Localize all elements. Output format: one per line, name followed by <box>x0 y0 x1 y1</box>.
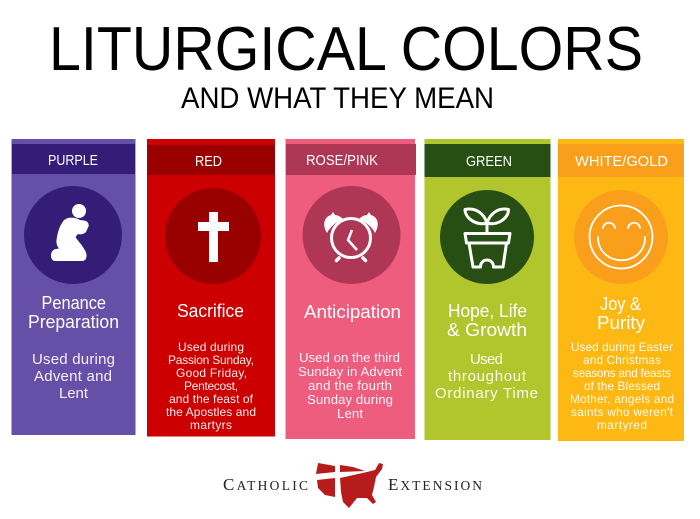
text: gold usage: of the Blessed <box>584 380 660 393</box>
heading: penance preparation <box>28 292 119 332</box>
header band: rose/pink <box>286 144 416 175</box>
heading: sacrifice: Sacrifice <box>177 300 244 321</box>
logo: Catholic Extension <box>223 463 482 508</box>
text: red usage: Used during <box>178 340 244 354</box>
heading: hope, life and growth: & Growth <box>447 319 527 340</box>
text: rose usage: and the fourth <box>308 378 392 393</box>
text: green usage: throughout <box>448 368 527 385</box>
text: red usage: Passion Sunday, <box>168 353 254 367</box>
text: rose usage: Sunday during <box>307 392 393 407</box>
text: red usage: and the feast of <box>169 392 254 406</box>
subtitle: AND WHAT THEY MEAN <box>181 82 494 115</box>
text: gold usage: martyred <box>597 419 647 432</box>
header band: rose/pink: ROSE/PINK <box>306 153 378 169</box>
header band: purple <box>12 144 135 174</box>
text: rose usage <box>298 350 402 421</box>
text: gold usage: Mother, angels and <box>570 393 674 406</box>
logo wordmark: Catholic: CATHOLIC <box>223 475 308 494</box>
heading: joy and purity <box>597 293 646 333</box>
text: purple usage: Advent and <box>34 368 112 385</box>
heading: hope, life and growth <box>447 300 527 340</box>
header band: green <box>424 144 550 177</box>
text: rose usage: Sunday in Advent <box>298 364 402 379</box>
icon: potted plant <box>440 190 534 284</box>
title: LITURGICAL COLORS <box>49 15 643 84</box>
heading: joy and purity: Purity <box>597 312 646 333</box>
header band: white/gold <box>558 144 684 177</box>
panel: white/gold <box>558 139 684 441</box>
text: red usage: Pentecost, <box>184 379 238 393</box>
text: gold usage: seasons and feasts <box>573 367 671 380</box>
text: green usage <box>435 351 538 402</box>
heading: joy and purity: Joy & <box>600 293 642 314</box>
heading: hope, life and growth: Hope, Life <box>448 300 527 321</box>
panel: red <box>147 139 275 436</box>
icon: alarm clock <box>302 186 400 284</box>
logo wordmark: Extension: EXTENSION <box>388 475 482 494</box>
text: purple usage: Used during <box>32 351 115 368</box>
text: green usage: Used <box>470 351 503 368</box>
text: purple usage: Lent <box>59 385 89 402</box>
text: rose usage: Lent <box>337 406 363 421</box>
header band: red: RED <box>195 154 222 170</box>
text: gold usage: and Christmas <box>583 354 661 367</box>
heading: anticipation: Anticipation <box>304 301 401 322</box>
text: red usage: martyrs <box>190 418 232 432</box>
header band: white/gold: WHITE/GOLD <box>575 154 668 170</box>
text: gold usage <box>570 341 674 432</box>
text: rose usage: Used on the third <box>299 350 400 365</box>
header band: purple: PURPLE <box>48 153 98 169</box>
text: red usage <box>166 340 256 432</box>
heading: penance preparation: Penance <box>42 292 106 313</box>
icon: cross <box>165 188 261 284</box>
icon: praying figure <box>24 186 122 284</box>
text: red usage: the Apostles and <box>166 405 256 419</box>
text: gold usage: Used during Easter <box>571 341 673 354</box>
text: purple usage <box>32 351 115 402</box>
panel: rose/pink <box>286 139 416 439</box>
text: green usage: Ordinary Time <box>435 385 538 402</box>
header band: red <box>148 145 275 175</box>
header band: green: GREEN <box>466 154 512 170</box>
logo icon: US map with cross <box>316 463 383 508</box>
icon: smiling face <box>574 190 668 284</box>
panel: green <box>424 139 550 440</box>
text: red usage: Good Friday, <box>176 366 247 380</box>
heading: penance preparation: Preparation <box>28 311 119 332</box>
text: gold usage: saints who weren't <box>571 406 674 419</box>
panel: purple <box>12 139 136 435</box>
